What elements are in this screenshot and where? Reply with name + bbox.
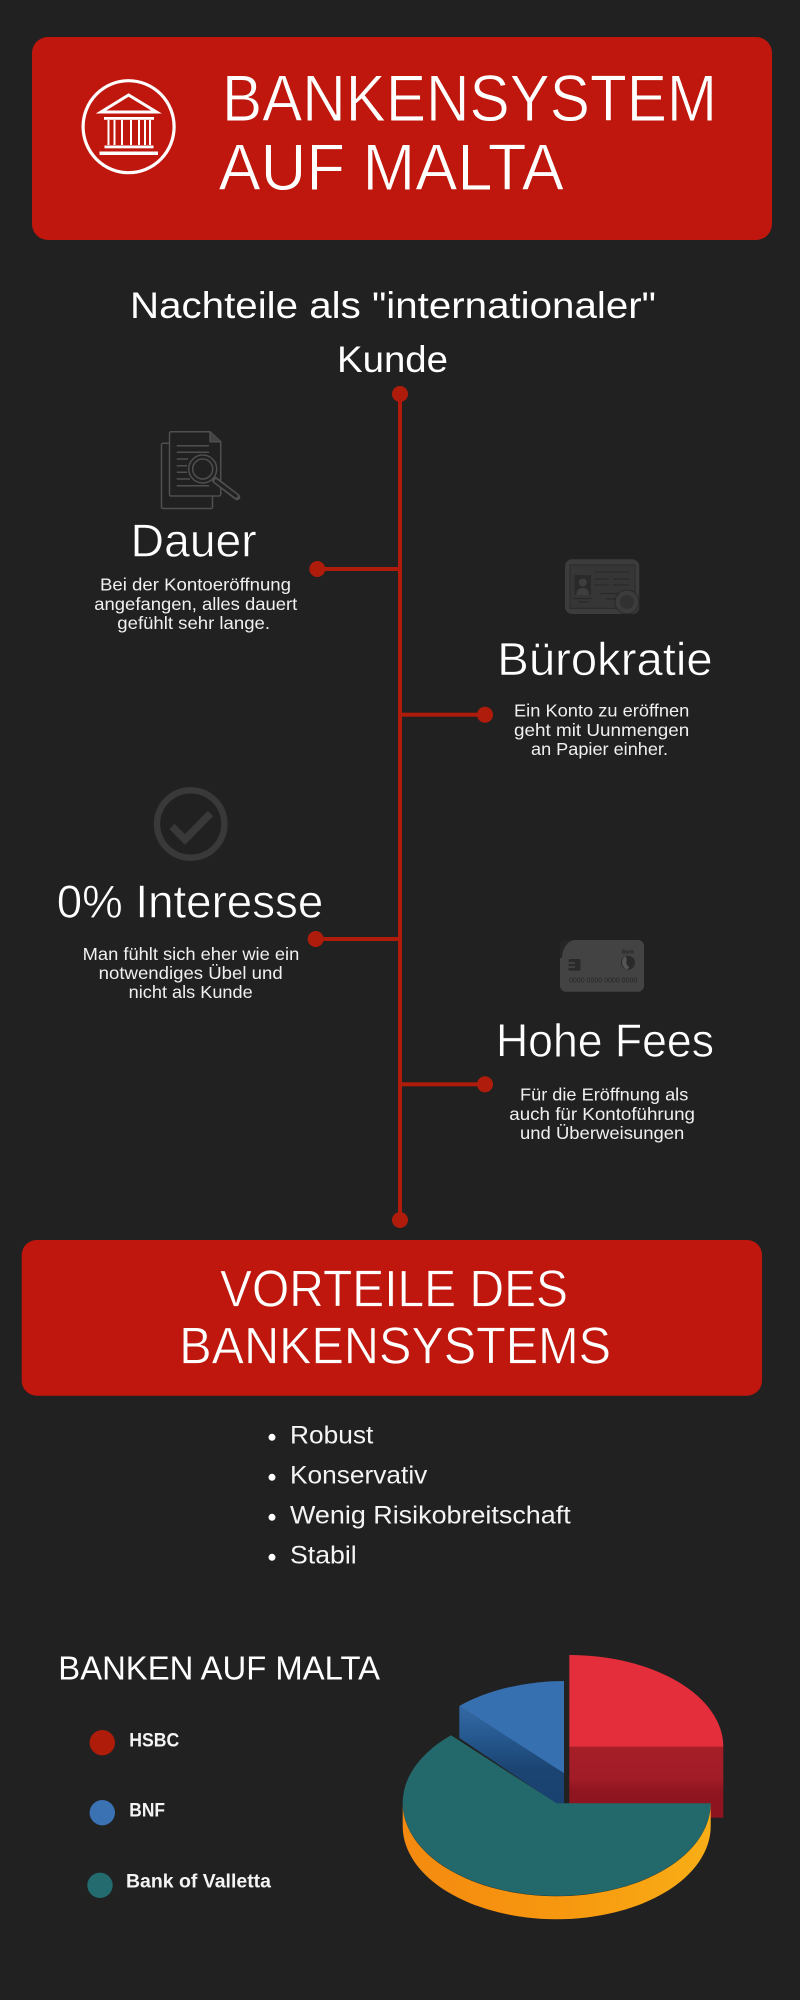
legend: BNF (129, 1801, 165, 1822)
legend: Bank of Valletta (126, 1871, 271, 1892)
icon: document with magnifier (162, 432, 237, 508)
list: Vorteile: Stabil (290, 1541, 357, 1569)
block: 0% Interesse: 0% Interesse (57, 876, 323, 928)
list: Vorteile: Robust (290, 1421, 373, 1449)
block: 0% Interesse: Man fühlt sich eher wie ein (83, 944, 299, 964)
panel: Vorteile banner: VORTEILE DES (220, 1261, 568, 1319)
legend (87, 1730, 271, 1898)
icon: credit card: 0000 0000 0000 0000 (569, 978, 637, 985)
block: 0% Interesse: notwendiges Übel und (99, 963, 283, 983)
icon: credit card: Bank (622, 949, 634, 955)
legend: HSBC (129, 1731, 180, 1752)
timeline (308, 386, 493, 1228)
block: 0% Interesse: nicht als Kunde (129, 982, 253, 1002)
block: Dauer: angefangen, alles dauert (94, 594, 297, 614)
block: 0% Interesse (57, 876, 323, 1002)
heading: Banken auf Malta: BANKEN AUF MALTA (58, 1649, 380, 1686)
list: Vorteile (268, 1421, 571, 1569)
panel: Vorteile banner: BANKENSYSTEMS (179, 1317, 611, 1375)
heading: Nachteile: Nachteile als "internationaler" (130, 285, 656, 326)
block: Bürokratie: Bürokratie (497, 633, 713, 685)
icon: check circle (157, 790, 224, 858)
title text: AUF MALTA (218, 130, 564, 204)
block: Hohe Fees: Hohe Fees (496, 1015, 714, 1067)
pie chart (403, 1655, 723, 1919)
icon: credit card (560, 940, 644, 992)
block: Dauer: gefühlt sehr lange. (117, 613, 270, 633)
list: Vorteile: Wenig Risikobreitschaft (290, 1501, 571, 1529)
block: Dauer (94, 515, 297, 633)
block: Bürokratie: geht mit Uunmengen (514, 720, 689, 740)
panel: Vorteile banner (22, 1240, 762, 1396)
heading: Nachteile (130, 285, 656, 380)
icon: ID card (565, 559, 639, 614)
block: Hohe Fees: Für die Eröffnung als (520, 1085, 689, 1105)
list: Vorteile: Konservativ (290, 1461, 428, 1489)
block: Bürokratie: Ein Konto zu eröffnen (514, 701, 689, 721)
block: Bürokratie: an Papier einher. (531, 739, 668, 759)
panel: title banner (32, 37, 772, 240)
title text: BANKENSYSTEM (222, 61, 717, 135)
block: Dauer: Bei der Kontoeröffnung (100, 575, 291, 595)
icon: bank building (83, 81, 174, 173)
block: Bürokratie (497, 633, 713, 759)
title text (218, 61, 717, 204)
block: Hohe Fees: und Überweisungen (520, 1123, 684, 1143)
block: Dauer: Dauer (131, 515, 257, 567)
block: Hohe Fees: auch für Kontoführung (509, 1104, 695, 1124)
heading: Nachteile: Kunde (337, 339, 448, 380)
block: Hohe Fees (496, 1015, 714, 1143)
